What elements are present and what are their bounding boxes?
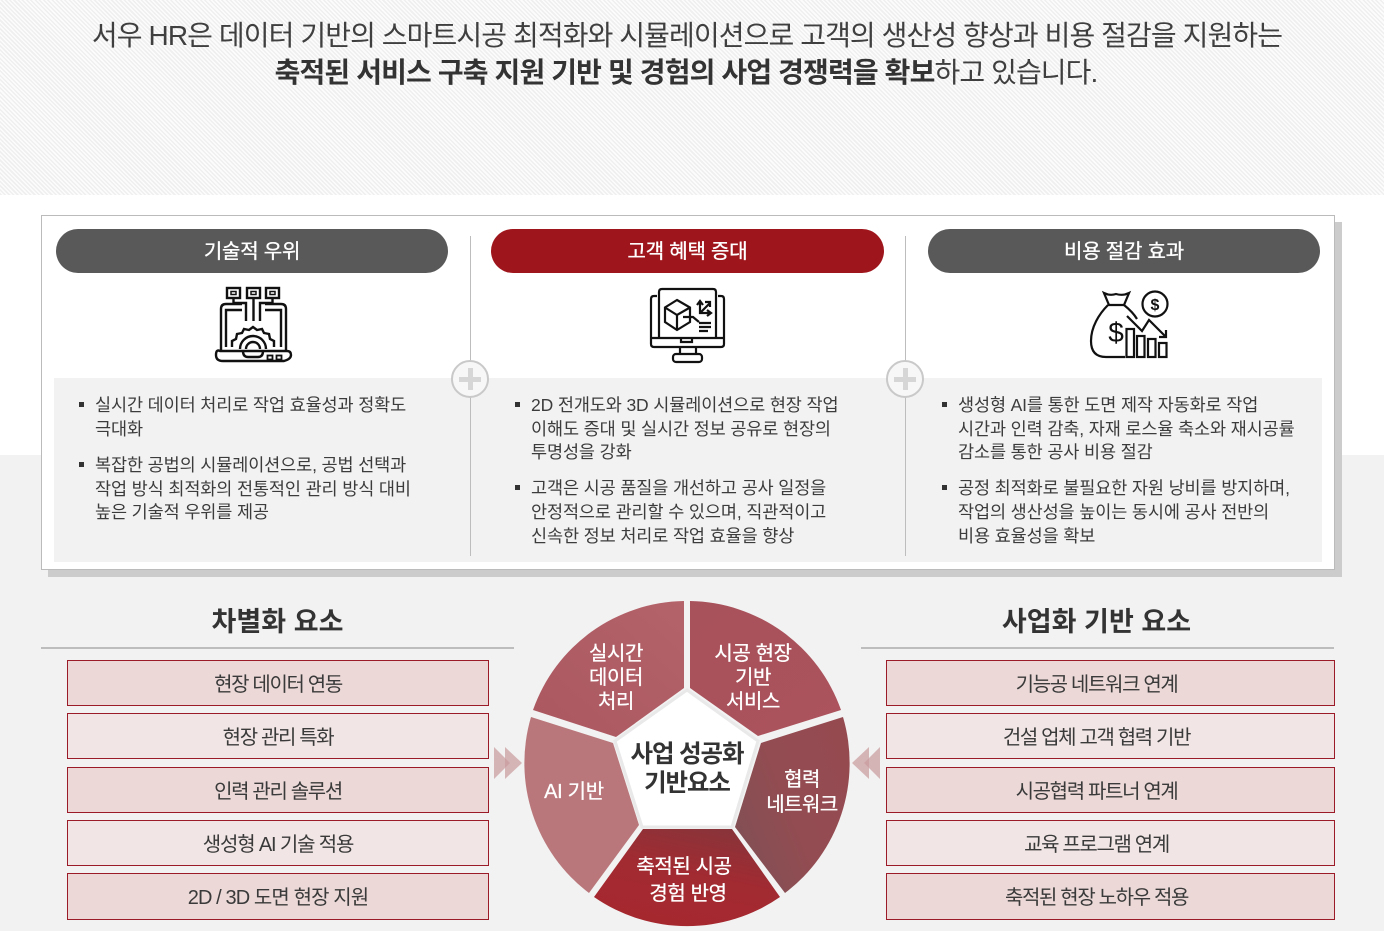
- segment: field-based service: 기반: [735, 666, 771, 689]
- icon: laptop with gear: [214, 286, 292, 362]
- segment: field-based service: 서비스: [726, 690, 780, 713]
- heading: commercialization base: 사업화 기반 요소: [1002, 607, 1191, 637]
- list: commercialization base: 시공협력 파트너 연계: [1016, 781, 1177, 803]
- text block: customer benefit bullets: 이해도 증대 및 실시간 정보 공유로 현장의: [531, 419, 831, 439]
- list: differentiators: [67, 660, 489, 920]
- segment: AI base: [524, 717, 639, 893]
- plus connector left: [451, 360, 489, 398]
- title: intro statement: [92, 20, 1282, 88]
- text block: technical advantage bullets: 극대화: [95, 419, 143, 439]
- text block: customer benefit bullets: [515, 395, 838, 546]
- text block: customer benefit bullets: 투명성을 강화: [531, 442, 632, 462]
- segment: field-based service: [690, 601, 841, 736]
- title: intro statement: 서우 HR은 데이터 기반의 스마트시공 최적화와 시뮬레이션으로 고객의 생산성 향상과 비용 절감을 지원하는: [92, 20, 1282, 51]
- segment: collaboration network: [735, 717, 850, 893]
- text block: customer benefit bullets: 고객은 시공 품질을 개선하고 공사 일정을: [531, 478, 826, 498]
- heading: technical advantage: 기술적 우위: [204, 241, 300, 263]
- heading: differentiators: 차별화 요소: [211, 607, 344, 637]
- heading: cost saving: 비용 절감 효과: [1064, 241, 1184, 263]
- icon: monitor with 3D cube: [650, 288, 726, 364]
- list: commercialization base: [886, 660, 1335, 920]
- chart: success factors pentagon pie: [524, 601, 850, 926]
- text block: technical advantage bullets: 작업 방식 최적화의 전통적인 관리 방식 대비: [95, 479, 411, 499]
- segment: accumulated experience: 경험 반영: [649, 882, 727, 905]
- icon: money bag with falling chart: $: [1151, 297, 1160, 314]
- segment: AI base: AI 기반: [544, 780, 604, 803]
- text block: cost saving bullets: 생성형 AI를 통한 도면 제작 자동화로 작업: [958, 395, 1258, 415]
- text block: cost saving bullets: 시간과 인력 감축, 자재 로스율 축소와 재시공률: [958, 419, 1295, 439]
- text block: technical advantage bullets: 높은 기술적 우위를 제공: [95, 502, 269, 522]
- list: differentiators: 현장 관리 특화: [223, 727, 333, 749]
- text block: customer benefit bullets: 안정적으로 관리할 수 있으며, 직관적이고: [531, 502, 826, 522]
- panel shadow: [48, 222, 1342, 577]
- center pentagon label: 사업 성공화: [631, 740, 744, 768]
- list: differentiators: 현장 데이터 연동: [214, 674, 342, 696]
- list: differentiators: 2D / 3D 도면 현장 지원: [188, 887, 368, 909]
- list: commercialization base: 축적된 현장 노하우 적용: [1005, 887, 1188, 909]
- icon: money bag with falling chart: [1090, 290, 1169, 358]
- heading: technical advantage: [56, 229, 448, 273]
- heading: customer benefit: 고객 혜택 증대: [628, 241, 747, 263]
- arrow: right chevrons: [852, 747, 880, 779]
- list: commercialization base: 기능공 네트워크 연계: [1016, 674, 1177, 696]
- text block: technical advantage bullets: [79, 395, 411, 522]
- segment: collaboration network: 협력: [784, 768, 820, 791]
- icon: money bag with falling chart: $: [1108, 317, 1124, 348]
- list: commercialization base: 교육 프로그램 연계: [1024, 834, 1169, 856]
- center pentagon label: 기반요소: [644, 769, 730, 797]
- list: differentiators: 인력 관리 솔루션: [214, 781, 342, 803]
- text block: customer benefit bullets: 2D 전개도와 3D 시뮬레이션으로 현장 작업: [531, 395, 838, 415]
- segment: real-time data: 실시간: [589, 642, 643, 665]
- heading: customer benefit: [491, 229, 884, 273]
- heading: cost saving: [928, 229, 1320, 273]
- segment: accumulated experience: [594, 829, 780, 926]
- text block: technical advantage bullets: 복잡한 공법의 시뮬레이션으로, 공법 선택과: [95, 455, 406, 475]
- text block: technical advantage bullets: 실시간 데이터 처리로 작업 효율성과 정확도: [95, 395, 406, 415]
- segment: real-time data: 데이터: [589, 666, 643, 689]
- segment: real-time data: [533, 601, 684, 737]
- text block: cost saving bullets: 작업의 생산성을 높이는 동시에 공사 전반의: [958, 502, 1269, 522]
- title: intro statement: 축적된 서비스 구축 지원 기반 및 경험의 사업 경쟁력을 확보하고 있습니다.: [275, 57, 1097, 88]
- text block: cost saving bullets: 비용 효율성을 확보: [958, 526, 1095, 546]
- text block: cost saving bullets: 감소를 통한 공사 비용 절감: [958, 442, 1153, 462]
- plus connector right: [886, 360, 924, 398]
- panel: three value columns: [41, 215, 1335, 570]
- list: commercialization base: 건설 업체 고객 협력 기반: [1003, 727, 1190, 749]
- text block: cost saving bullets: 공정 최적화로 불필요한 자원 낭비를 방지하며,: [958, 478, 1290, 498]
- center pentagon label: [615, 690, 758, 827]
- list: differentiators: 생성형 AI 기술 적용: [203, 834, 353, 856]
- text block: customer benefit bullets: 신속한 정보 처리로 작업 효율을 향상: [531, 526, 794, 546]
- segment: field-based service: 시공 현장: [714, 642, 792, 665]
- segment: accumulated experience: 축적된 시공: [636, 855, 732, 878]
- segment: collaboration network: 네트워크: [766, 793, 838, 816]
- text block: cost saving bullets: [942, 395, 1295, 546]
- segment: real-time data: 처리: [598, 690, 634, 713]
- arrow: left chevrons: [494, 747, 522, 779]
